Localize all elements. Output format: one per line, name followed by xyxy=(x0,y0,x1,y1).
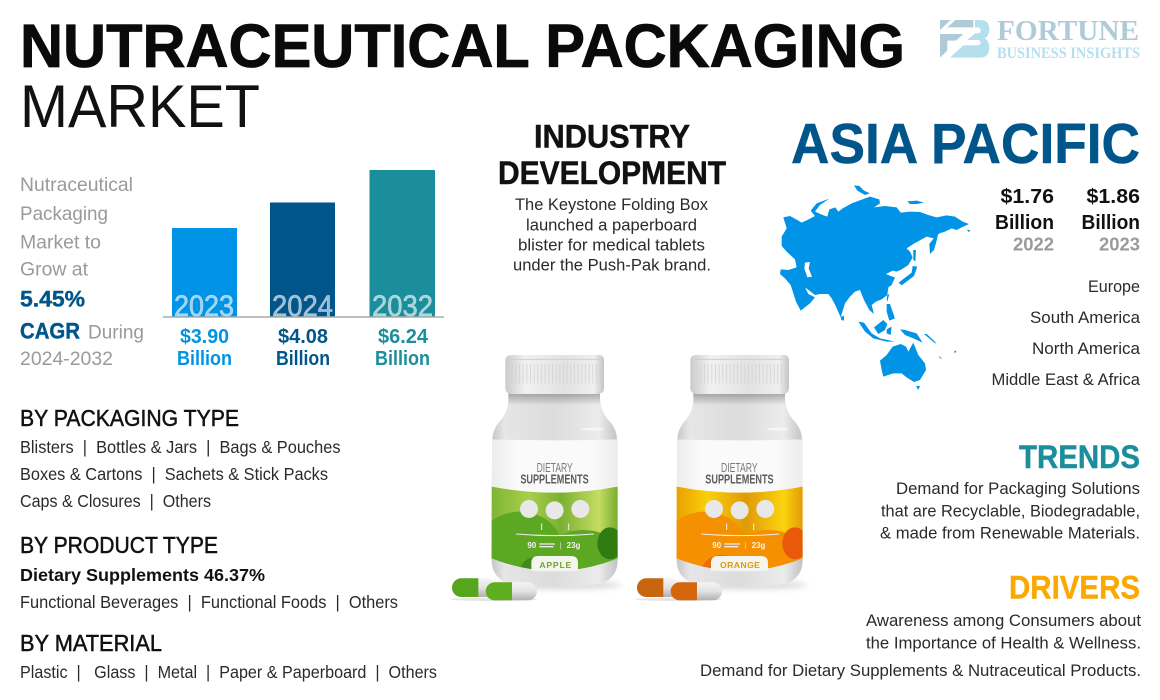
logo: Fortune Business Insights: BUSINESS INSIGHTS xyxy=(997,45,1140,62)
stat: 2023 xyxy=(1082,185,1140,254)
segment: by material: Plastic | Glass | Metal | Paper & Paperboard | Others xyxy=(20,662,437,682)
heading: DEVELOPMENT xyxy=(498,155,726,191)
stat: 2022: 2022 xyxy=(1013,234,1054,254)
trends text xyxy=(880,480,1140,542)
bar: 2024: 2024 xyxy=(272,290,333,323)
segment: by product type xyxy=(20,532,398,612)
bar: 2032: Billion xyxy=(375,348,430,370)
title: MARKET xyxy=(20,73,260,140)
text: CAGR summary: Grow at xyxy=(20,258,89,280)
drivers text xyxy=(700,612,1141,680)
industry development xyxy=(498,118,726,274)
description: The Keystone Folding Box xyxy=(515,195,708,214)
bottle: apple: 90 xyxy=(527,541,537,550)
capsules: green xyxy=(450,578,537,601)
trends text: & made from Renewable Materials. xyxy=(880,524,1140,542)
stat: 2023: $1.86 xyxy=(1086,185,1140,208)
bottle: orange xyxy=(676,355,805,592)
bar: 2023 xyxy=(172,228,237,370)
bar chart: market size xyxy=(163,170,444,370)
text: CAGR summary: 2024-2032 xyxy=(20,348,113,370)
text: CAGR summary: During xyxy=(88,322,144,344)
stats: Asia Pacific market size xyxy=(995,185,1140,254)
segment: by packaging type: Blisters | Bottles & Jars | Bags & Pouches xyxy=(20,437,341,457)
bar: 2024: Billion xyxy=(276,348,330,370)
islands xyxy=(854,185,870,195)
heading: drivers: DRIVERS xyxy=(1009,570,1140,606)
segment: by product type: Dietary Supplements 46.37% xyxy=(20,565,265,585)
bottle: apple: APPLE xyxy=(539,560,572,570)
map: Asia Pacific xyxy=(780,185,971,390)
stat: 2022: Billion xyxy=(995,211,1054,234)
segment: by packaging type: BY PACKAGING TYPE xyxy=(20,405,239,431)
bar: 2024 xyxy=(270,202,335,370)
bottle: apple: DIETARY xyxy=(537,460,573,475)
segment: by packaging type: Caps & Closures | Others xyxy=(20,491,211,511)
bottle: apple xyxy=(492,355,620,592)
description: launched a paperboard xyxy=(526,216,697,234)
list: other regions xyxy=(992,277,1141,389)
drivers text: the Importance of Health & Wellness. xyxy=(866,634,1141,652)
title: NUTRACEUTICAL PACKAGING xyxy=(20,12,905,80)
bottle: orange: 90 xyxy=(712,541,722,550)
trends text: Demand for Packaging Solutions xyxy=(896,480,1140,498)
bar: 2032: $6.24 xyxy=(378,326,429,348)
list: other regions: Europe xyxy=(1088,277,1140,296)
segment: by packaging type: Boxes & Cartons | Sachets & Stick Packs xyxy=(20,464,328,484)
title xyxy=(20,12,905,140)
stat: 2023: 2023 xyxy=(1099,234,1140,254)
bottle: orange: SUPPLEMENTS xyxy=(705,473,774,487)
heading: trends: TRENDS xyxy=(1019,439,1140,475)
trends xyxy=(880,439,1140,542)
list: other regions: North America xyxy=(1032,339,1141,358)
stat: 2023: Billion xyxy=(1082,211,1140,234)
segment: by material xyxy=(20,630,437,682)
bar: 2032: 2032 xyxy=(372,290,433,323)
list: other regions: South America xyxy=(1030,308,1141,327)
drivers text: Awareness among Consumers about xyxy=(866,612,1141,630)
bottle: apple: SUPPLEMENTS xyxy=(520,473,589,487)
stat: 2022: $1.76 xyxy=(1000,185,1054,208)
heading xyxy=(498,118,726,191)
text: CAGR summary: Market to xyxy=(20,232,101,254)
bottle: apple: 23g xyxy=(567,541,581,550)
text: CAGR summary: Nutraceutical xyxy=(20,174,133,196)
text: CAGR summary xyxy=(20,174,144,370)
text: CAGR summary: 5.45% xyxy=(20,286,85,312)
inland sea: Caspian xyxy=(804,262,812,277)
capsules: orange xyxy=(635,578,722,601)
bar: 2024: $4.08 xyxy=(278,326,328,348)
drivers text: Demand for Dietary Supplements & Nutraceutical Products. xyxy=(700,662,1141,680)
heading: Asia Pacific: ASIA PACIFIC xyxy=(791,112,1140,176)
description: under the Push-Pak brand. xyxy=(513,256,711,274)
segment: by material: BY MATERIAL xyxy=(20,630,162,656)
stat: 2022 xyxy=(995,185,1054,254)
bottle: orange: ORANGE xyxy=(720,560,760,570)
trends text: that are Recyclable, Biodegradable, xyxy=(881,502,1140,520)
bar: 2023: Billion xyxy=(177,348,232,370)
segment: by product type: BY PRODUCT TYPE xyxy=(20,532,218,558)
drivers xyxy=(700,570,1141,680)
bar: 2023: 2023 xyxy=(174,290,234,323)
bar: 2023: $3.90 xyxy=(180,326,229,348)
bar: 2032 xyxy=(370,170,435,370)
logo: Fortune Business Insights xyxy=(940,15,1140,62)
bottle: orange: 23g xyxy=(752,541,766,550)
segment: by product type: Functional Beverages | Functional Foods | Others xyxy=(20,592,398,612)
text: CAGR summary: Packaging xyxy=(20,203,108,225)
text: CAGR summary: CAGR xyxy=(20,318,80,344)
bottle: orange: DIETARY xyxy=(721,460,758,475)
segment: by packaging type xyxy=(20,405,341,511)
illustration: supplement bottles xyxy=(450,355,808,601)
logo: Fortune Business Insights: FORTUNE xyxy=(997,15,1139,47)
icon: FB logo mark xyxy=(940,20,989,58)
description: blister for medical tablets xyxy=(518,236,705,254)
heading: INDUSTRY xyxy=(534,118,690,154)
description xyxy=(513,195,711,274)
list: other regions: Middle East & Africa xyxy=(992,370,1141,389)
